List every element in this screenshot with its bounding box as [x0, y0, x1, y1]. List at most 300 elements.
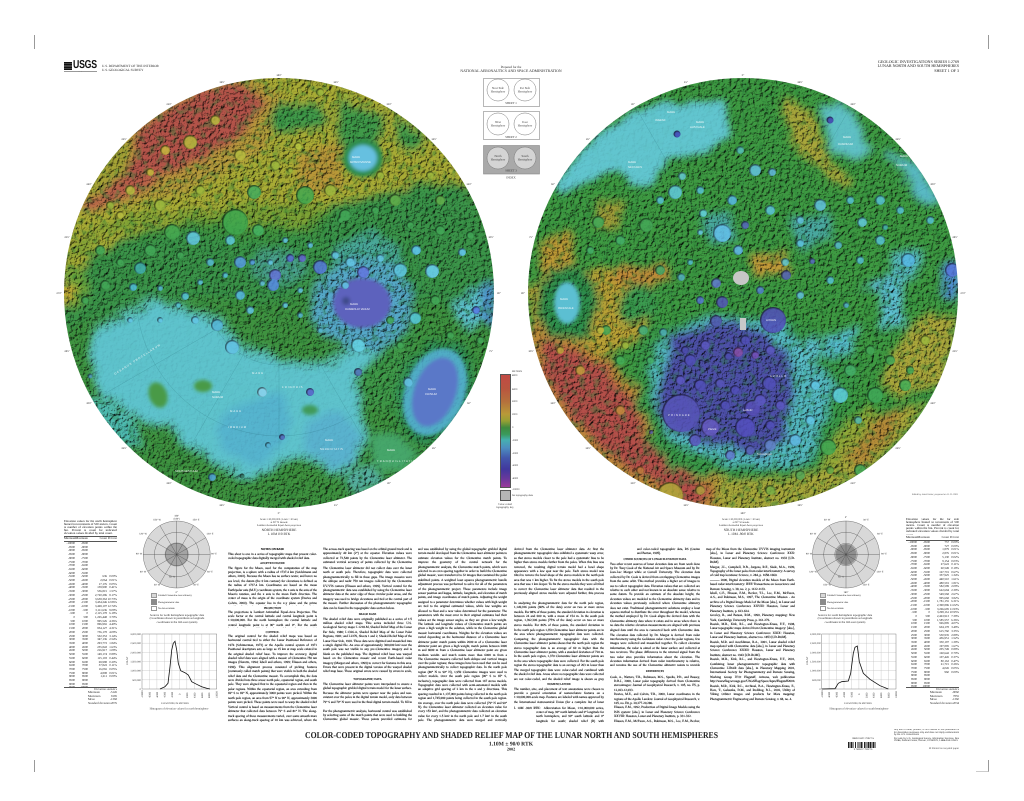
- north polar source diagram: 90° E: [211, 552, 217, 556]
- table rows: 7000: [69, 667, 75, 671]
- x axis labels: 8000: [208, 692, 211, 698]
- south polar source diagram: 120° E: [877, 570, 884, 574]
- table rows: 2000: [911, 629, 917, 633]
- table rows: 37,822: [99, 663, 107, 667]
- north polar source diagram: 0°: [176, 591, 178, 594]
- table rows: -8500: [81, 548, 88, 552]
- table rows: 293,772: [97, 641, 107, 645]
- sheet index diagram: INDEX: [506, 176, 516, 180]
- table rows: 3000: [82, 634, 88, 638]
- table rows: 4500: [82, 645, 88, 649]
- longitude tick labels: 240°: [86, 183, 92, 186]
- longitude tick labels: 330°: [850, 103, 856, 106]
- table rows: 2,064: [100, 578, 107, 582]
- table rows: 205,749: [939, 647, 949, 651]
- table rows: 11.02%: [950, 603, 959, 607]
- x axis labels: -8000: [828, 691, 831, 698]
- longitude tick labels: 45°: [432, 447, 436, 450]
- south source caption: Sources for south hemisphere topographic data: [818, 612, 872, 616]
- feature names: MARE: [350, 302, 358, 306]
- longitude tick labels: 315°: [895, 138, 901, 141]
- feature names: IMBRIUM: [228, 425, 247, 429]
- scale labels: -6000: [512, 464, 518, 467]
- table rows: 2.89%: [951, 633, 959, 637]
- x axis labels: 0: [858, 693, 861, 695]
- table rows: -7000: [910, 562, 917, 566]
- table rows: 536,815: [97, 589, 107, 593]
- sheet 1 box: [484, 78, 540, 106]
- table rows: 2500: [69, 634, 75, 638]
- longitude tick labels: 225°: [895, 447, 901, 450]
- scattered craters: [81, 88, 484, 481]
- table rows: -4000: [81, 582, 88, 586]
- south source caption: [818, 612, 872, 624]
- feature names: MARE: [900, 154, 908, 158]
- table rows: -7500: [68, 560, 75, 564]
- south pole area: [733, 271, 749, 330]
- table rows: 1.57%: [109, 589, 117, 593]
- table rows: -6500: [923, 562, 930, 566]
- legend: no data: [151, 606, 175, 611]
- table rows: -2500: [910, 596, 917, 600]
- table rows: 255,843: [97, 645, 107, 649]
- longitude tick labels: 90°: [521, 292, 525, 295]
- feature names: MARE: [325, 438, 333, 442]
- reference list: Eliason, E.M., 1992, Production of Digital Image Models using the ISIS system: [abs.], in Lunar and Planetary Science Conference XXVIII: Houston, Lunar and Planetary Institute, p. 331-332.: [614, 705, 700, 718]
- table rows: 2,720,296: [95, 593, 107, 597]
- table rows: 6000: [911, 658, 917, 662]
- longitude tick labels: 150°: [386, 103, 392, 106]
- table rows: 0.70%: [951, 651, 959, 655]
- crop mark: bottom left: [34, 760, 35, 772]
- table rows: 0.47%: [951, 658, 959, 662]
- table rows: 4.36%: [109, 619, 117, 623]
- feature names: FRIGORIS: [282, 385, 304, 389]
- availability note: Any use of trade, product, or firm names in this publication is for descriptive purposes only and does not imply endorsement by the U.S. Government: [894, 729, 959, 736]
- table rows: 549,568: [939, 592, 949, 596]
- elevation statistics: Minimum: [88, 690, 100, 694]
- x axis labels: 2000: [186, 692, 189, 698]
- header: prepared for NASA: NATIONAL AERONAUTICS AND SPACE ADMINISTRATION: [460, 69, 562, 73]
- frequency curve: [160, 641, 210, 689]
- table rows: -500: [70, 611, 75, 615]
- y axis labels: 0: [819, 688, 821, 691]
- heading: nomenclature: NOMENCLATURE: [547, 682, 571, 686]
- north scale and heading: [257, 518, 301, 536]
- table rows: -2500: [81, 593, 88, 597]
- south polar source diagram: 60° E: [877, 532, 883, 536]
- y axis labels: 2,500,000: [810, 642, 821, 645]
- table rows: 1,585,557: [937, 618, 949, 622]
- table rows: Maximum: [918, 535, 930, 539]
- legend: photogrammetric: [820, 599, 848, 605]
- table rows: Maximum: [76, 536, 88, 540]
- table rows: -4000: [910, 584, 917, 588]
- longitude tick labels: 135°: [585, 447, 591, 450]
- table rows: 6500: [69, 663, 75, 667]
- y axis title: COUNT: [126, 656, 129, 665]
- table rows: -5500: [68, 574, 75, 578]
- y axis labels: 3,000,000: [130, 633, 142, 636]
- table rows: 0.44%: [109, 656, 117, 660]
- table rows: 12.74%: [108, 604, 117, 608]
- table rows: 9500: [924, 681, 930, 685]
- reference list: [610, 674, 700, 723]
- elevation statistics: -5145: [110, 690, 117, 694]
- table rows: -6500: [81, 563, 88, 567]
- feature names: AITKEN: [766, 318, 776, 322]
- legend: photogrammetric: Photogrammetric data: [158, 600, 179, 604]
- table rows: 2.54%: [109, 637, 117, 641]
- north histogram: [126, 633, 219, 710]
- table rows: 69,988: [99, 660, 107, 664]
- table rows: -1500: [910, 603, 917, 607]
- heading: references: REFERENCES: [646, 669, 664, 673]
- table rows: 500: [912, 618, 917, 622]
- sheet index diagram: [483, 78, 540, 180]
- feature names: INGENII: [655, 118, 666, 122]
- table rows: -9000: [68, 548, 75, 552]
- table rows: 4500: [924, 644, 930, 648]
- table rows: 4000: [82, 641, 88, 645]
- table rows: 0.05%: [109, 667, 117, 671]
- elevation colour regions: [520, 100, 960, 520]
- x axis labels: -6000: [836, 691, 838, 698]
- table rows: 615,760: [939, 629, 949, 633]
- longitude tick labels: 180°: [740, 512, 746, 515]
- scale labels: 8000: [512, 374, 517, 376]
- south polar source diagram: 150° E: [863, 584, 870, 586]
- scale labels: -8000: [512, 477, 518, 480]
- color elevation key: [496, 370, 533, 509]
- elevation statistics: 2034: [953, 701, 959, 705]
- table rows: -7500: [910, 559, 917, 563]
- longitude tick labels: 315°: [121, 447, 127, 450]
- table rows: -2000: [68, 600, 75, 604]
- longitude tick labels: 60°: [467, 402, 471, 405]
- feature names: AUSTRALE: [690, 125, 705, 129]
- table rows: 8000: [924, 670, 930, 674]
- table rows: 3.48%: [951, 625, 959, 629]
- table rows: 3,111,636: [95, 608, 107, 612]
- table rows: -3500: [81, 585, 88, 589]
- table rows: Count: [942, 535, 949, 539]
- table rows: 0.88%: [951, 647, 959, 651]
- south histogram: [806, 633, 898, 710]
- north polar source diagram: 30° E: [193, 584, 199, 586]
- feature names: NECTARIS: [628, 165, 642, 169]
- longitude tick labels: 345°: [797, 81, 803, 84]
- table rows: 0.01%: [951, 551, 959, 555]
- elevation statistics: Elevation statistics: [936, 686, 959, 690]
- table rows: 4500: [911, 647, 917, 651]
- scale labels: -10000: [512, 488, 519, 491]
- reference list: Greeley, R., and Batson, R.M., 1990, Planetary mapping: New York, Cambridge University Press, p. 261-276.: [710, 613, 795, 622]
- x axis labels: -4000: [163, 691, 166, 698]
- map credit: Edited by Janet Dieter; prepared on 11-21-2001: [912, 494, 958, 496]
- feature names: MARE: [628, 160, 636, 164]
- table rows: 3000: [69, 637, 75, 641]
- south scale and heading: L 10M -90/0 RTK: [728, 532, 754, 536]
- sheet 3 box, highlighted: Hemisphere: [491, 158, 506, 162]
- feature names: MARE: [387, 448, 395, 452]
- crop mark: top right: [988, 35, 989, 49]
- table rows: 9500: [911, 684, 917, 688]
- table rows: 7000: [924, 662, 930, 666]
- table rows: 160,642: [939, 651, 949, 655]
- x axis labels: -10000: [821, 690, 824, 698]
- table rows: Minimum: [64, 536, 76, 540]
- table rows: 3,638,363: [95, 597, 107, 601]
- elevation statistics: Maximum: [930, 694, 942, 698]
- scale labels: 0: [512, 426, 513, 428]
- north polar source diagram: [136, 514, 217, 594]
- table rows: 7500: [82, 667, 88, 671]
- table rows: -3000: [68, 593, 75, 597]
- table rows: 7500: [924, 666, 930, 670]
- table rows: 2500: [82, 630, 88, 634]
- feature names: [113, 155, 437, 473]
- table rows: [64, 536, 117, 689]
- heading: control: CONTROL: [266, 630, 279, 634]
- longitude tick labels: 105°: [528, 350, 534, 353]
- table rows: 926,895: [939, 621, 949, 625]
- table rows: 3500: [69, 641, 75, 645]
- sheet 3 box, highlighted: South: [521, 154, 529, 158]
- Humboldtianum basin: [333, 278, 391, 328]
- longitude tick labels: 285°: [952, 236, 958, 239]
- table rows: -9000: [910, 547, 917, 551]
- key caption: [496, 503, 514, 509]
- table rows: 1,879: [942, 547, 949, 551]
- sheet 1 box: Near Side: [492, 86, 505, 90]
- south source caption: coordinates in the 360-east system): [825, 620, 865, 624]
- table rows: 330,197: [939, 640, 949, 644]
- table rows: 27,622: [941, 562, 949, 566]
- table rows: 582,589: [939, 584, 949, 588]
- sheet 1 box: SHEET 1: [505, 101, 517, 105]
- longitude tick labels: 330°: [166, 482, 172, 485]
- feature names: HUMORUM: [838, 142, 854, 146]
- heading: topographic data: TOPOGRAPHIC DATA: [353, 677, 382, 681]
- north source legend: [151, 593, 192, 611]
- table rows: -3000: [81, 589, 88, 593]
- table rows: -8000: [923, 551, 930, 555]
- x axis labels: 2000: [865, 692, 868, 698]
- elevation statistics: Standard deviation: [88, 701, 111, 705]
- x axis title: ELEVATION, IN METERS: [161, 702, 189, 705]
- table rows: -500: [912, 610, 917, 614]
- table rows: 1.84%: [109, 641, 117, 645]
- table rows: 622,684: [939, 588, 949, 592]
- table rows: 5500: [69, 656, 75, 660]
- table rows: -1500: [68, 604, 75, 608]
- elevation statistics: -9060: [952, 690, 959, 694]
- north scale and heading: Scale 1:10,000,000 (1 mm = 10 km): [260, 518, 298, 520]
- table rows: -8500: [923, 547, 930, 551]
- table rows: -4000: [923, 581, 930, 585]
- table rows: 0: [916, 614, 917, 618]
- sheet 2 box: Hemisphere: [491, 124, 506, 128]
- table rows: 500: [70, 619, 75, 623]
- table rows: 8000: [82, 671, 88, 675]
- table rows: -1500: [81, 600, 88, 604]
- table rows: 1,265,448: [95, 615, 107, 619]
- legend: no data: No data available: [827, 607, 844, 610]
- table rows: -4500: [81, 578, 88, 582]
- table rows: 0.00%: [951, 544, 959, 548]
- table rows: 10.73%: [108, 597, 117, 601]
- table rows: 6000: [924, 655, 930, 659]
- sheet 1 box: Hemisphere: [491, 90, 506, 94]
- feature names: NUBIUM: [212, 395, 224, 399]
- table rows: -500: [924, 607, 930, 611]
- table rows: 3000: [911, 636, 917, 640]
- south polar source diagram: 60° S: [838, 576, 844, 578]
- north elevation table: [64, 520, 117, 705]
- table rows: -7000: [923, 559, 930, 563]
- x axis labels: [821, 690, 898, 698]
- reference list: Isbell, C.E., Eliason, E.M., Becker, T.L., Lee, E.M., McEwen, A.S., and Robinson, M.S., 1997, The Clementine Mission - An archive of a Digital Image Model of the Moon [abs.], in Lunar and Planetary Science Conference XXVIII: Houston, Lunar and Planetary Institute, p. 623-624.: [710, 591, 795, 613]
- longitude tick labels: 345°: [219, 504, 225, 507]
- y axis labels: 1,000,000: [130, 670, 142, 673]
- elevation statistics: Minimum: [930, 690, 942, 694]
- sheet 1 box: Far Side: [520, 86, 531, 90]
- south polar source diagram: 150° W: [823, 584, 832, 586]
- table rows: 3,266,695: [937, 607, 949, 611]
- heading: notes on base: NOTES ON BASE: [261, 547, 284, 551]
- longitude tick labels: 15°: [684, 81, 688, 84]
- main title: 2002: [507, 746, 515, 752]
- header: series information: GEOLOGIC INVESTIGATIONS SERIES I-2769: [878, 58, 959, 64]
- table rows: 960: [944, 670, 949, 674]
- x axis labels: -6000: [156, 691, 159, 698]
- north polar source diagram: 90° W: [136, 552, 143, 556]
- feature names: MARE: [843, 135, 851, 139]
- longitude tick labels: 105°: [488, 236, 494, 239]
- south polar source diagram: 0°: [845, 516, 847, 519]
- table rows: -8500: [910, 551, 917, 555]
- table rows: 17,176: [99, 582, 107, 586]
- north hemisphere map: [56, 74, 501, 515]
- table rows: 440,510: [939, 577, 949, 581]
- south source legend: [820, 593, 861, 611]
- header: department: U.S. GEOLOGICAL SURVEY: [102, 68, 144, 72]
- y axis labels: 1,500,000: [130, 660, 142, 664]
- elevation colour regions: [64, 78, 494, 495]
- scale labels: 6000: [512, 388, 517, 390]
- feature names: HUMBOLDTIANUM: [345, 307, 370, 311]
- north scale and heading: NORTH HEMISPHERE: [262, 528, 296, 532]
- table rows: 1000: [911, 621, 917, 625]
- table rows: 1.34%: [951, 573, 959, 577]
- table rows: -3500: [910, 588, 917, 592]
- table rows: -1500: [923, 599, 930, 603]
- header: series information: SHEET 1 OF 3: [934, 68, 959, 73]
- north scale and heading: L 10M 0/0 RTK: [268, 532, 290, 536]
- USGS logo: USGS: [73, 59, 96, 71]
- longitude tick labels: 120°: [466, 183, 472, 186]
- longitude tick labels: 180°: [276, 74, 282, 77]
- table rows: 757: [944, 540, 949, 544]
- scale labels: -4000: [512, 452, 518, 454]
- scale labels: 4000: [512, 400, 517, 403]
- table rows: 9000: [82, 678, 88, 682]
- feature names: Leibnitz: [743, 408, 753, 412]
- table rows: -5000: [81, 574, 88, 578]
- north scale and heading: at 90° N latitude: [270, 521, 288, 524]
- crop mark: top left: [34, 35, 35, 49]
- caption: Histogram of elevation values for north hemisphere: [150, 706, 209, 710]
- header: series information: LUNAR NORTH AND SOUTH HEMISPHERES: [878, 63, 959, 68]
- table rows: 6000: [82, 656, 88, 660]
- longitude tick labels: 210°: [166, 103, 172, 106]
- south scale and heading: [719, 518, 763, 536]
- elevation statistics: Elevation statistics: [94, 686, 117, 690]
- x axis labels: [141, 690, 219, 698]
- feature names: MARE: [428, 387, 436, 391]
- graticule lines: [528, 78, 958, 508]
- x axis labels: 10000: [895, 691, 898, 698]
- x axis labels: -2000: [171, 691, 174, 698]
- recycled paper note: ♻ Printed on recycled paper: [929, 747, 959, 750]
- no-data swatch: [500, 490, 511, 501]
- elevation statistics: -1360: [952, 697, 959, 701]
- table rows: 9.09%: [109, 608, 117, 612]
- caption: Histogram of elevation values for south hemisphere: [830, 706, 889, 710]
- longitude tick labels: 165°: [333, 81, 339, 84]
- text column 2: image base and topographic data: [323, 547, 412, 721]
- table rows: 896,965: [97, 622, 107, 626]
- south polar source diagram: 30° E: [863, 518, 869, 522]
- USGS logo: [64, 59, 97, 72]
- table rows: 7000: [911, 666, 917, 670]
- table rows: 0.18%: [951, 566, 959, 570]
- main title: [305, 730, 718, 752]
- longitude tick labels: 60°: [551, 183, 555, 186]
- text column 4: nomenclature: [514, 547, 604, 723]
- x axis labels: 6000: [201, 692, 204, 698]
- elevation statistics: 7855: [953, 694, 959, 698]
- table rows: 5500: [82, 652, 88, 656]
- feature names: APOLLO: [770, 374, 787, 378]
- Schrodinger-like crater centre: [554, 282, 580, 324]
- heading: adopted figure: ADOPTED FIGURE: [260, 561, 285, 565]
- table rows: -1000: [68, 608, 75, 612]
- x axis labels: 8000: [888, 692, 891, 698]
- north polar source diagram: 60° E: [207, 570, 213, 574]
- table rows: -6000: [81, 567, 88, 571]
- longitude tick labels: 150°: [630, 482, 636, 485]
- table rows: 1.08%: [109, 648, 117, 652]
- north polar source diagram: 60° W: [140, 570, 147, 574]
- table rows: 0.05%: [109, 582, 117, 586]
- barcode: 9 780607 799275: [854, 748, 872, 751]
- y axis labels: 2,500,000: [130, 642, 142, 645]
- table rows: -8000: [68, 556, 75, 560]
- grid and frame: [822, 634, 896, 689]
- north polar source diagram: 180°: [174, 514, 179, 518]
- graticule lines: [64, 78, 494, 508]
- sheet 3 box, highlighted: [484, 146, 540, 174]
- heading: other sources: OTHER SOURCES OF LUNAR ELEVATION DATA: [623, 556, 687, 560]
- table rows: 500: [84, 615, 88, 619]
- table rows: 167,701: [939, 570, 949, 574]
- south polar source diagram: 120° W: [809, 570, 818, 574]
- legend: gridded altimetry: Gridded Clementine laser altimetry: [158, 594, 192, 597]
- table rows: 7500: [911, 670, 917, 674]
- table rows: 8000: [911, 673, 917, 677]
